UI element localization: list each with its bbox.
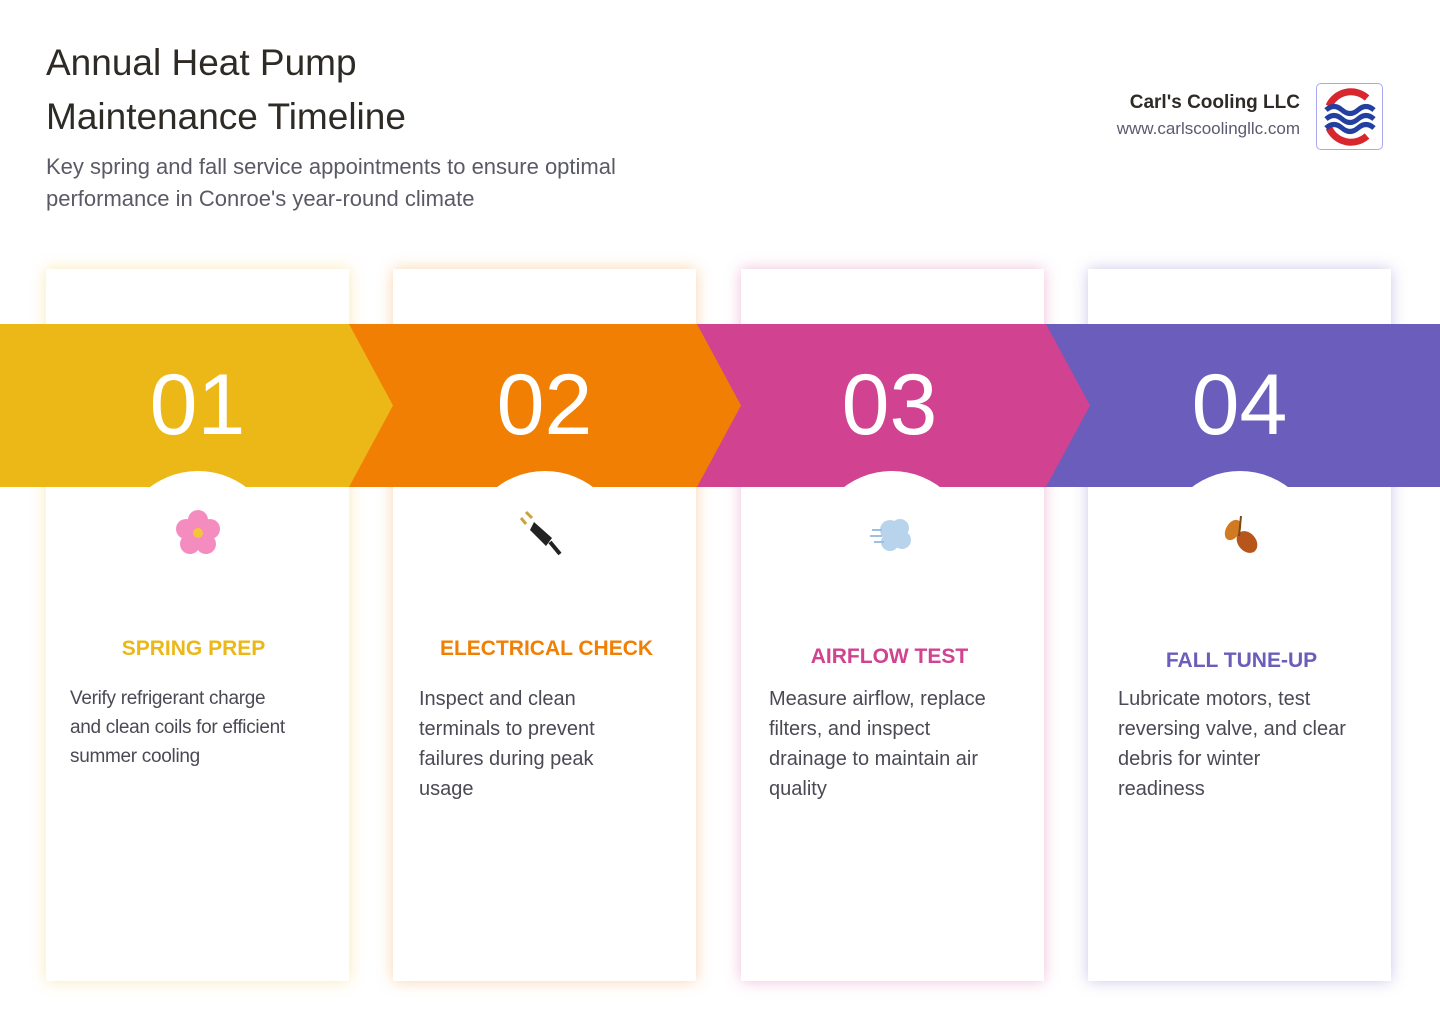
text: 04 (1192, 357, 1287, 453)
step 2 text: ELECTRICAL CHECK (440, 637, 653, 660)
brand: Carl's Cooling LLC (1130, 92, 1300, 113)
text: 02 (497, 357, 592, 453)
icon: flower (176, 510, 220, 554)
icon: wind (870, 519, 911, 551)
circles (118, 471, 278, 631)
title: Annual Heat Pump (46, 42, 357, 83)
step 3 text: AIRFLOW TEST (811, 645, 968, 668)
card 1 (46, 269, 349, 981)
text: Inspect and clean terminals to prevent failures during peak usage (419, 688, 595, 800)
card 3 (741, 269, 1044, 981)
timeline band (0, 324, 1440, 487)
brand: www.carlscoolingllc.com (1117, 119, 1300, 138)
subtitle: Key spring and fall service appointments to ensure optimal performance in Conroe's year-round climate (46, 154, 616, 211)
step 1 text: SPRING PREP (122, 637, 265, 660)
text: Verify refrigerant charge (70, 688, 265, 709)
text: and clean coils for efficient summer cooling (70, 717, 285, 767)
brand (1116, 92, 1300, 138)
step 4 text: FALL TUNE-UP (1166, 649, 1317, 672)
text: Lubricate motors, test reversing valve, and clear debris for winter readiness (1118, 688, 1346, 800)
icon: plug (520, 511, 562, 556)
card 2 (393, 269, 696, 981)
logo (1316, 83, 1383, 150)
numbers: 01 (150, 357, 245, 453)
card 4 (1088, 269, 1391, 981)
text: 03 (842, 357, 937, 453)
title: Maintenance Timeline (46, 96, 406, 137)
title (46, 42, 406, 137)
text: Measure airflow, replace filters, and inspect drainage to maintain air quality (769, 688, 986, 800)
icon: leaves (1224, 516, 1258, 553)
